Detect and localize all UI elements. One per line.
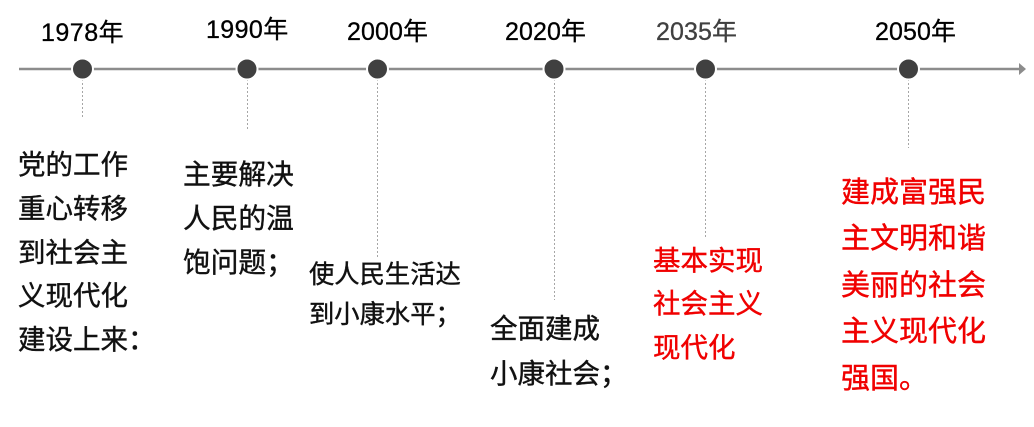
year label: 1978: 1978年 bbox=[41, 19, 124, 47]
year label: 2020: 2020年 bbox=[505, 18, 586, 46]
text block: 1990: 饱问题； bbox=[183, 247, 294, 278]
text block: 2000 bbox=[309, 261, 461, 329]
text block: 2035 bbox=[653, 244, 763, 362]
text block: 1990 bbox=[183, 159, 294, 278]
text block: 2000: 到小康水平； bbox=[309, 301, 461, 329]
text block: 2035: 基本实现 bbox=[653, 244, 763, 276]
year label: 2035: 2035年 bbox=[656, 18, 737, 46]
text block: 1978: 义现代化 bbox=[18, 280, 128, 311]
text block: 2050 bbox=[841, 176, 986, 394]
text block: 1978: 党的工作 bbox=[18, 149, 128, 180]
text block: 2000: 使人民生活达 bbox=[309, 261, 461, 289]
text block: 2050: 美丽的社会 bbox=[841, 270, 986, 302]
text block: 1978: 到社会主 bbox=[18, 236, 128, 268]
text block: 2050: 强国。 bbox=[841, 362, 928, 394]
text block: 1990: 人民的温 bbox=[183, 203, 294, 234]
text block: 2050: 建成富强民 bbox=[841, 176, 986, 208]
year label: 2000: 2000年 bbox=[347, 18, 428, 46]
text block: 2035: 社会主义 bbox=[653, 288, 763, 319]
text block: 1978: 建设上来： bbox=[18, 324, 156, 355]
year label: 2050: 2050年 bbox=[875, 18, 956, 46]
text block: 1990: 主要解决 bbox=[183, 159, 294, 190]
text block: 2050: 主义现代化 bbox=[841, 316, 986, 348]
year label: 1990: 1990年 bbox=[206, 16, 289, 44]
text block: 1978: 重心转移 bbox=[18, 193, 128, 224]
text block: 2020: 全面建成 bbox=[490, 312, 600, 344]
text block: 2050: 主文明和谐 bbox=[841, 223, 986, 255]
text block: 2035: 现代化 bbox=[653, 332, 736, 362]
text block: 2020 bbox=[490, 312, 628, 388]
text block: 2020: 小康社会； bbox=[490, 358, 628, 388]
text block: 1978 bbox=[18, 149, 156, 355]
